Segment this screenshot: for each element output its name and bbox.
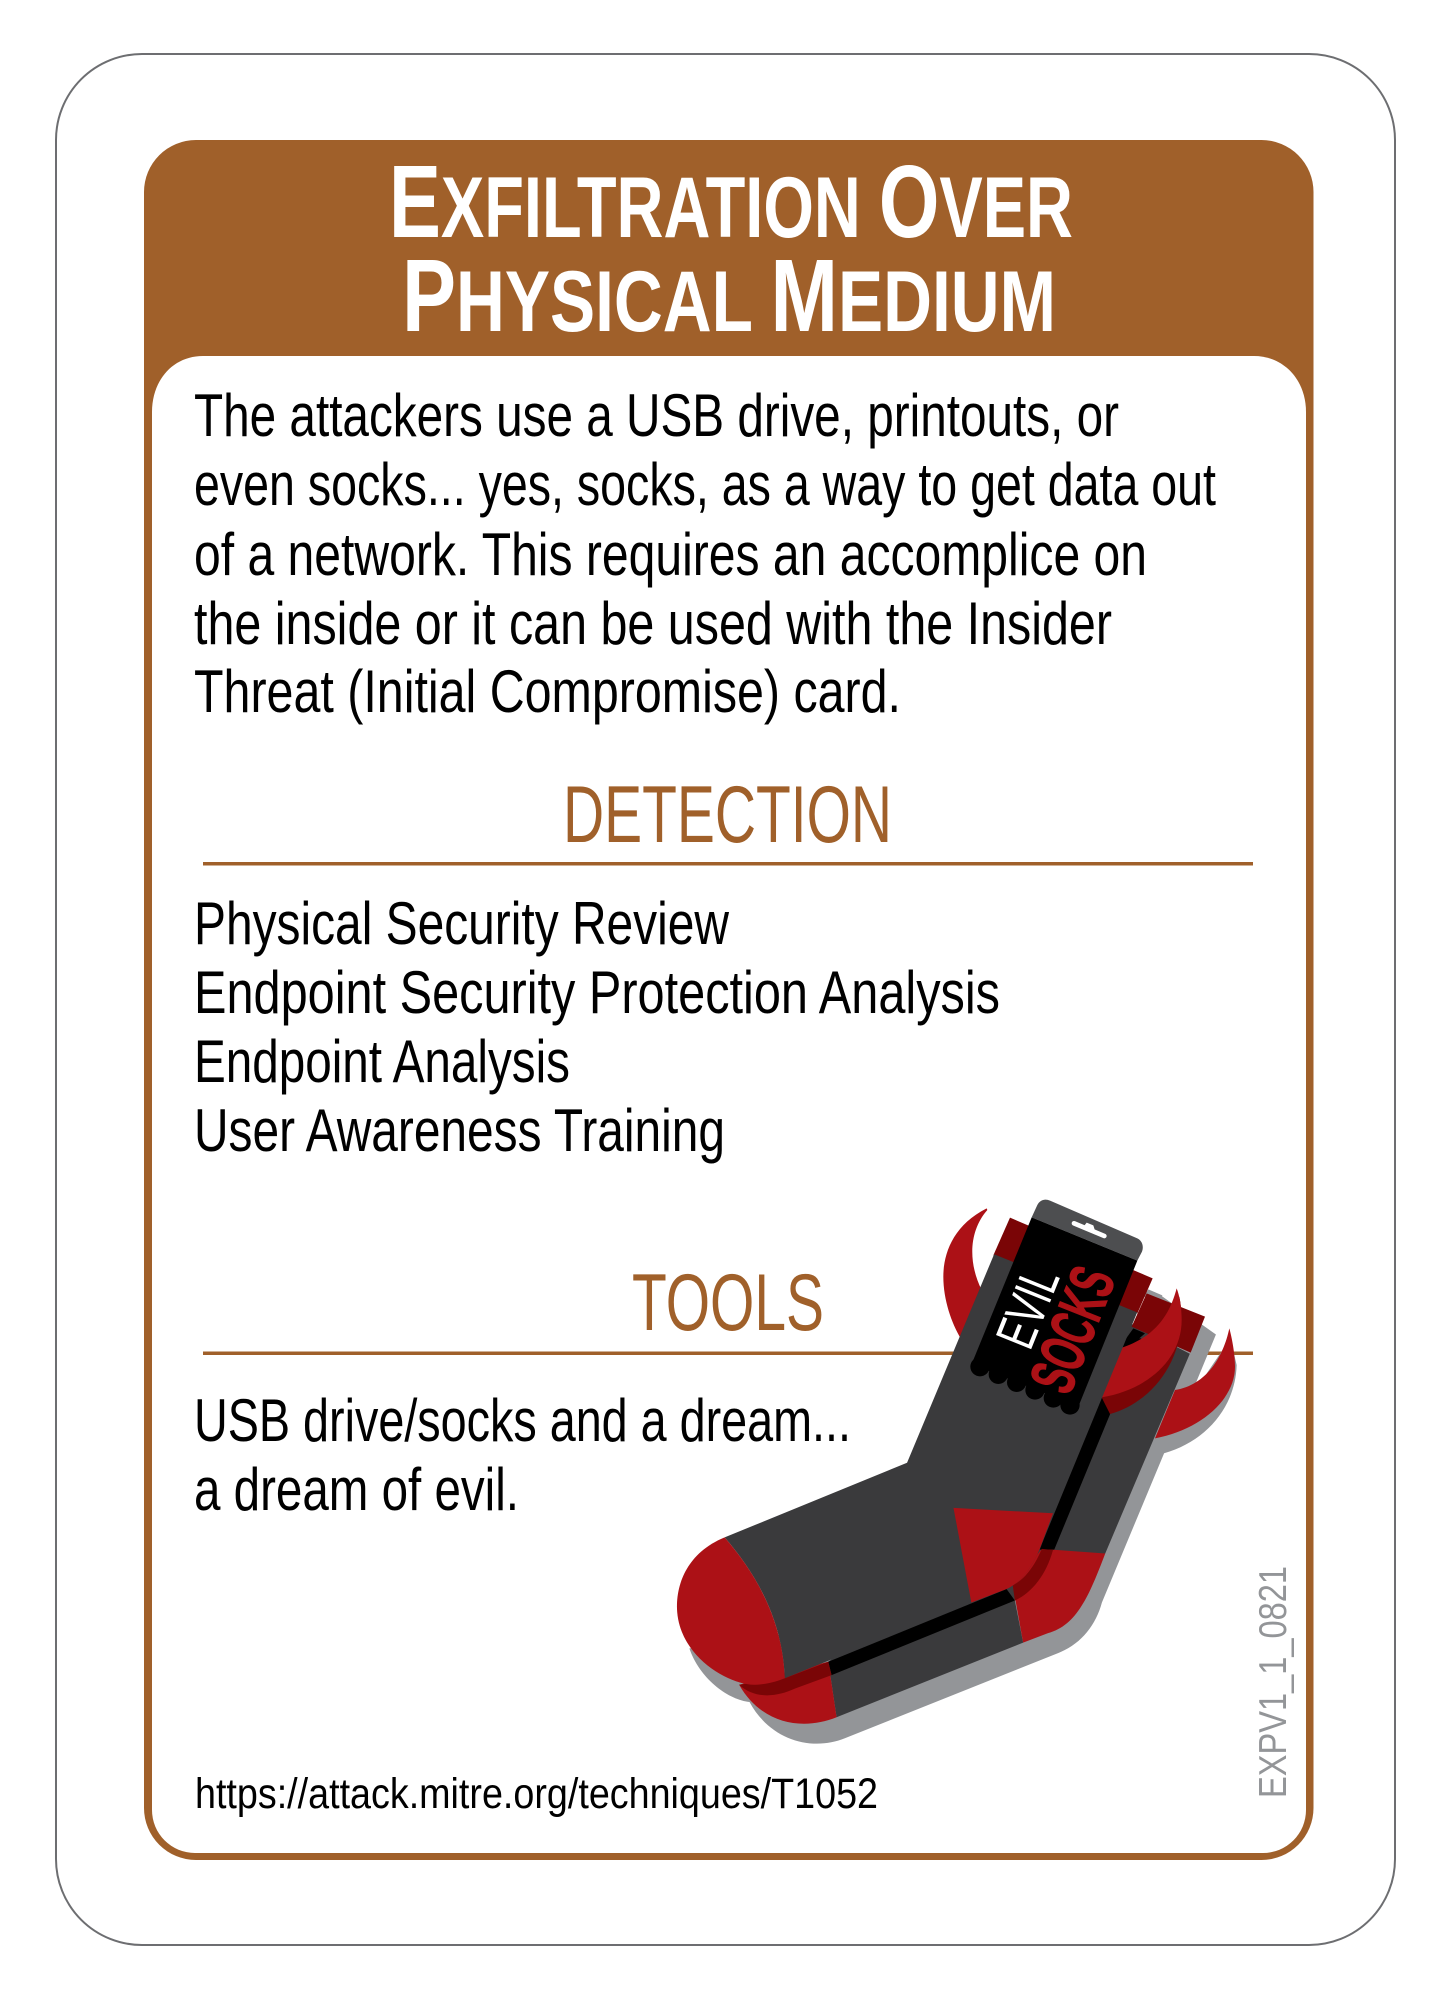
tools text: a dream of evil. — [194, 1456, 519, 1523]
description text block: of a network. This requires an accomplice on — [194, 521, 1147, 588]
title: PHYSICAL MEDIUM — [402, 238, 1056, 353]
title: EXFILTRATION OVER — [389, 144, 1073, 259]
heading: tools: TOOLS — [632, 1258, 824, 1348]
source url: https://attack.mitre.org/techniques/T1052 — [195, 1770, 878, 1818]
panel: brown card frame — [144, 140, 1314, 1860]
version code: EXPV1_1_0821 — [1252, 1566, 1295, 1798]
tools text: USB drive/socks and a dream... — [194, 1387, 851, 1454]
description text block: Threat (Initial Compromise) card. — [194, 658, 901, 725]
tag label: evil: EVIL — [984, 1258, 1071, 1356]
description text block — [194, 382, 1216, 725]
detection list: Endpoint Analysis — [194, 1028, 570, 1095]
detection list: Endpoint Security Protection Analysis — [194, 959, 1000, 1026]
tools text — [194, 1387, 851, 1523]
tag label: socks: SOCKS — [1017, 1257, 1129, 1402]
description text block: The attackers use a USB drive, printouts, or — [194, 382, 1119, 449]
title — [389, 144, 1073, 353]
panel: white content area — [152, 356, 1306, 1853]
description text block: the inside or it can be used with the Insider — [194, 590, 1112, 657]
detection list: User Awareness Training — [194, 1097, 725, 1164]
detection list: Physical Security Review — [194, 890, 730, 957]
heading: detection: DETECTION — [563, 770, 892, 860]
icon: evil socks illustration — [677, 1200, 1237, 1744]
detection list — [194, 890, 1000, 1164]
